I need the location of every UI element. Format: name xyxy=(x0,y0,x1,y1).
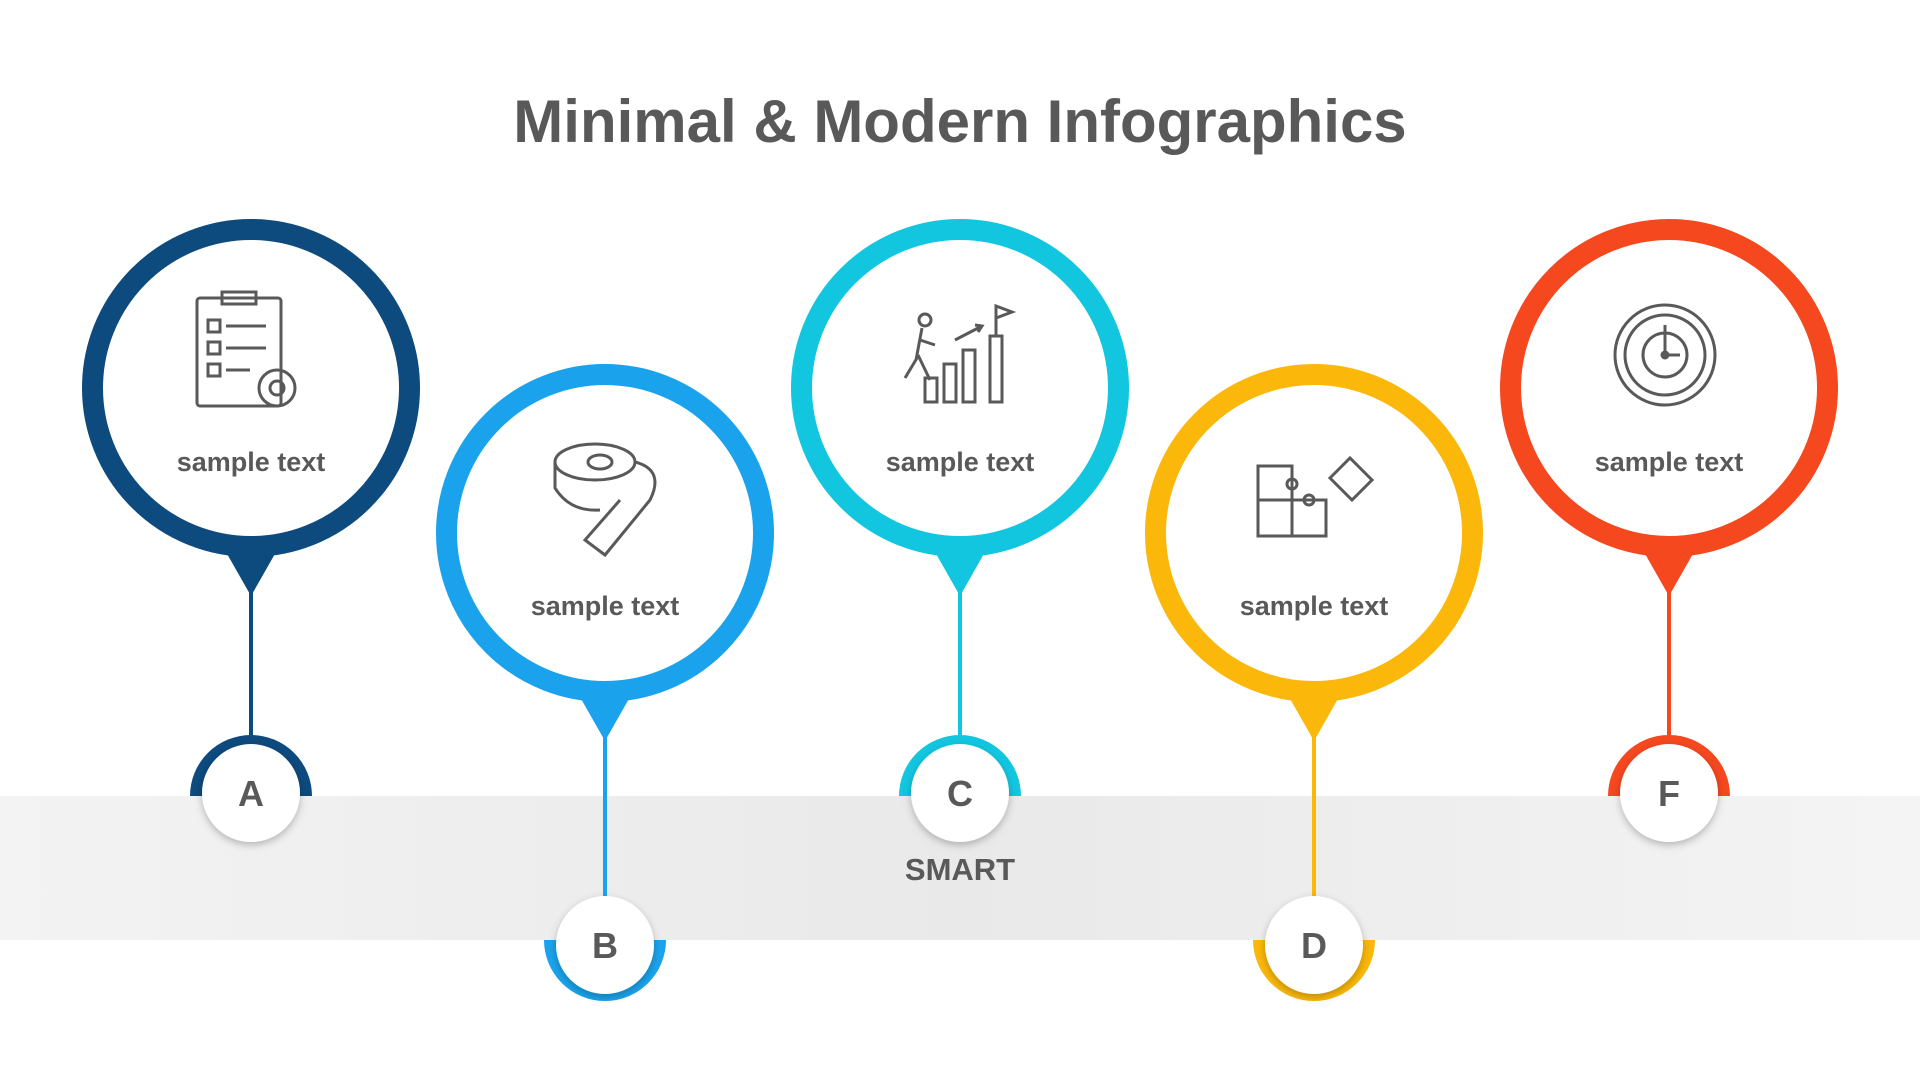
item F xyxy=(1510,230,1828,842)
item A: sample text xyxy=(177,447,325,477)
gray band xyxy=(0,796,1920,940)
icon: clipboard with gear xyxy=(197,292,295,406)
item C xyxy=(802,230,1118,842)
band label SMART: SMART xyxy=(905,852,1015,887)
icon: puzzle xyxy=(1258,458,1372,536)
item D xyxy=(1156,374,1472,1001)
item F: F xyxy=(1658,773,1680,814)
icon: measuring tape xyxy=(555,444,655,555)
item A: A xyxy=(238,773,264,814)
icon: growth chart xyxy=(905,306,1012,402)
item A xyxy=(92,230,410,842)
item B xyxy=(446,374,764,1001)
item B: B xyxy=(592,925,618,966)
title: Minimal & Modern Infographics xyxy=(513,88,1407,155)
item D: sample text xyxy=(1240,591,1388,621)
icon: clock gear xyxy=(1615,305,1715,405)
item B: sample text xyxy=(531,591,679,621)
item C: sample text xyxy=(886,447,1034,477)
item D: D xyxy=(1301,925,1327,966)
item F: sample text xyxy=(1595,447,1743,477)
item C: C xyxy=(947,773,973,814)
